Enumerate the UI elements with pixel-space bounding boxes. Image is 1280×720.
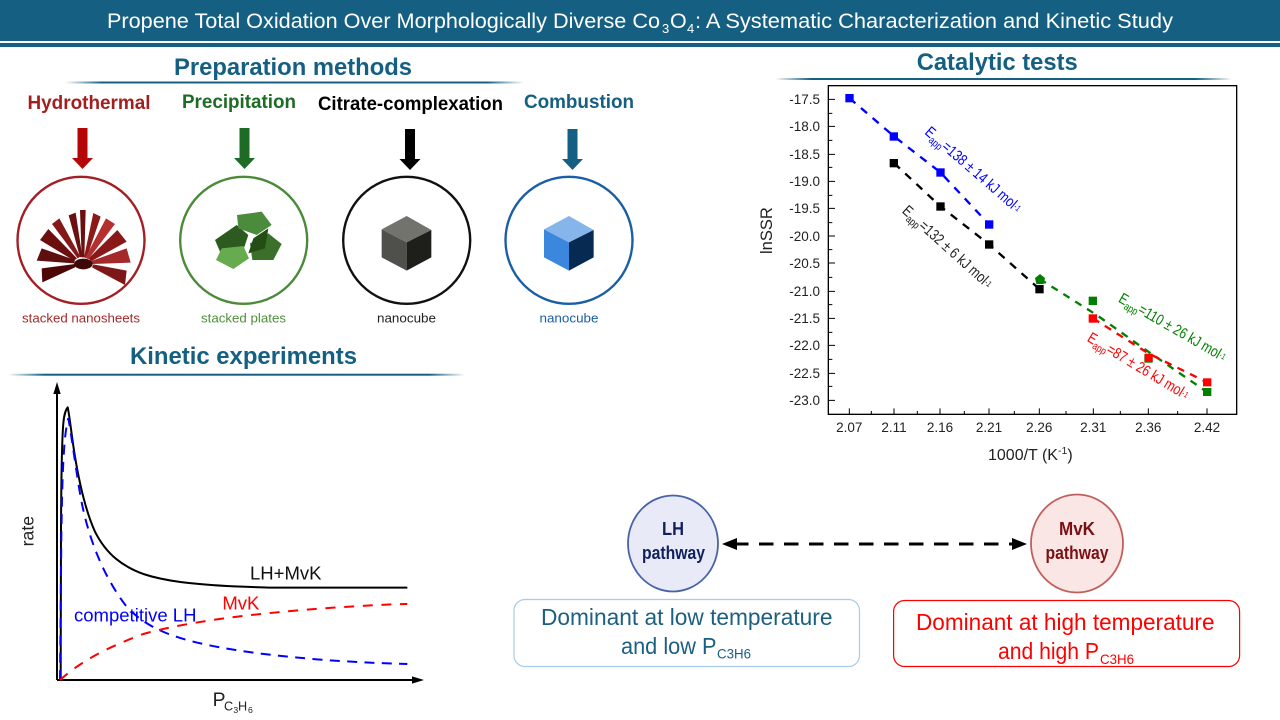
arrow: hydrothermal: [72, 128, 93, 169]
caption: black nanocube: nanocube: [377, 310, 436, 326]
rate axes: [53, 382, 424, 684]
annotation: green activation energy: E: [1116, 289, 1132, 308]
y axis tick labels: -19.5: [789, 201, 820, 216]
x axis tick labels: 2.26: [1026, 420, 1052, 435]
callout: LH dominance: [514, 600, 860, 666]
annotation: red activation energy: -1: [1180, 388, 1190, 400]
caption: stacked nanosheets: stacked nanosheets: [22, 310, 140, 326]
node: MvK pathway: pathway: [1046, 543, 1108, 563]
title banner: : A Systematic Characterization and Kinetic Study: [695, 9, 1173, 33]
x axis label: propene pressure: 3: [233, 705, 238, 715]
y axis tick labels: -23.0: [789, 393, 820, 408]
y axis tick labels: -20.5: [789, 256, 820, 271]
title banner: [0, 0, 1280, 47]
x axis tick labels: 2.16: [927, 420, 953, 435]
heading: preparation methods: Preparation methods: [174, 54, 412, 81]
x axis title: 1000/T (K: [988, 447, 1058, 464]
callout: LH dominance: Dominant at low temperature: [541, 604, 832, 630]
y axis tick labels: -22.0: [789, 338, 820, 353]
annotation: black activation energy: app: [903, 213, 922, 232]
callout: LH dominance: and low P: [621, 633, 716, 659]
x axis tick labels: 2.42: [1194, 420, 1220, 435]
x axis tick labels: 2.36: [1135, 420, 1161, 435]
annotation: red activation energy: =87 ± 26 kJ mol: [1104, 340, 1187, 400]
annotation: black activation energy: -1: [983, 278, 994, 289]
y axis title: lnSSR: [758, 207, 776, 254]
callout: LH dominance: C3H6: [717, 646, 751, 662]
y axis label: rate: rate: [17, 516, 37, 546]
x axis label: propene pressure: 6: [248, 705, 253, 715]
method label: combustion: Combustion: [524, 91, 634, 113]
icon: stacked plates: [180, 177, 307, 304]
series: green: [1035, 274, 1211, 396]
annotation: black activation energy: E: [899, 201, 917, 220]
x axis label: propene pressure: C: [224, 700, 233, 714]
node: LH pathway: [628, 496, 718, 592]
method label: citrate-complexation: Citrate-complexation: [318, 93, 503, 115]
callout: MvK dominance: C3H6: [1100, 651, 1134, 667]
label: competitive LH: competitive LH: [74, 605, 196, 626]
title banner: 3: [662, 21, 669, 36]
curve: MvK: [60, 604, 407, 680]
annotation: blue activation energy: =138 ± 14 kJ mol: [939, 137, 1021, 212]
title banner: O: [670, 9, 687, 33]
arrow: citrate-complexation: [400, 129, 420, 170]
annotation: blue activation energy: E: [922, 122, 940, 141]
annotation: red activation energy: app: [1090, 340, 1108, 358]
y axis tick labels: -21.5: [789, 311, 820, 326]
y axis tick labels: -21.0: [789, 284, 820, 299]
heading: kinetic experiments: Kinetic experiments: [130, 343, 357, 370]
series: blue: [845, 94, 993, 229]
annotation: black activation energy: =132 ± 6 kJ mol: [916, 216, 992, 288]
y axis tick labels: -22.5: [789, 366, 820, 381]
method label: hydrothermal: Hydrothermal: [28, 92, 150, 114]
caption: stacked plates: stacked plates: [201, 310, 286, 326]
node: MvK pathway: MvK: [1059, 519, 1095, 539]
x axis title: -1: [1058, 445, 1067, 457]
x axis label: propene pressure: H: [238, 700, 247, 714]
annotation: blue activation energy: app: [926, 135, 945, 153]
annotation: red activation energy: E: [1085, 328, 1101, 348]
y axis tick labels: -18.0: [789, 119, 820, 134]
arrow: precipitation: [234, 128, 255, 169]
y axis tick labels: -17.5: [789, 92, 820, 107]
label: LH+MvK: LH+MvK: [250, 563, 322, 584]
annotation: green activation energy: -1: [1217, 350, 1228, 362]
plot frame and ticks: [828, 86, 1237, 414]
x axis label: propene pressure: P: [213, 690, 226, 711]
node: MvK pathway: [1031, 494, 1123, 592]
chart: rate versus propene pressure: [17, 382, 424, 715]
callout: MvK dominance: [894, 600, 1240, 667]
arrow: combustion: [562, 129, 583, 170]
annotation: green activation energy: app: [1121, 301, 1140, 318]
chart: Arrhenius plot: [758, 86, 1237, 464]
label: MvK: MvK: [222, 592, 260, 613]
icon: black nanocube: [343, 177, 470, 304]
title banner: Propene Total Oxidation Over Morphologically Diverse Co: [107, 9, 660, 33]
x axis tick labels: 2.31: [1080, 420, 1106, 435]
title banner: 4: [687, 21, 694, 36]
curve: competitive LH: [60, 418, 407, 680]
curve: LH+MvK: [61, 407, 407, 680]
x axis tick labels: 2.11: [881, 420, 907, 435]
icon: stacked nanosheets: [18, 177, 144, 304]
arrow: double-headed dashed: [722, 538, 1027, 550]
y axis tick labels: -20.0: [789, 229, 820, 244]
caption: blue nanocube: nanocube: [540, 310, 598, 326]
callout: MvK dominance: Dominant at high temperature: [916, 609, 1214, 635]
node: LH pathway: LH: [662, 519, 684, 539]
x axis tick labels: 2.07: [836, 420, 862, 435]
x axis label: propene pressure: [213, 690, 253, 715]
callout: MvK dominance: and high P: [998, 638, 1099, 664]
y axis tick labels: [789, 92, 820, 408]
y axis tick labels: -19.0: [789, 174, 820, 189]
y axis tick labels: -18.5: [789, 147, 820, 162]
annotation: green activation energy: =110 ± 26 kJ mol: [1135, 300, 1225, 362]
x axis tick labels: 2.21: [976, 420, 1002, 435]
annotation: blue activation energy: -1: [1012, 202, 1023, 213]
icon: blue nanocube: [506, 177, 632, 304]
heading: catalytic tests: Catalytic tests: [917, 49, 1078, 76]
x axis tick labels: [836, 420, 1220, 435]
x axis title: ): [1067, 447, 1073, 464]
method label: precipitation: Precipitation: [182, 91, 296, 113]
node: LH pathway: pathway: [642, 543, 705, 563]
series: red: [1089, 314, 1211, 386]
series: black: [890, 159, 1044, 293]
